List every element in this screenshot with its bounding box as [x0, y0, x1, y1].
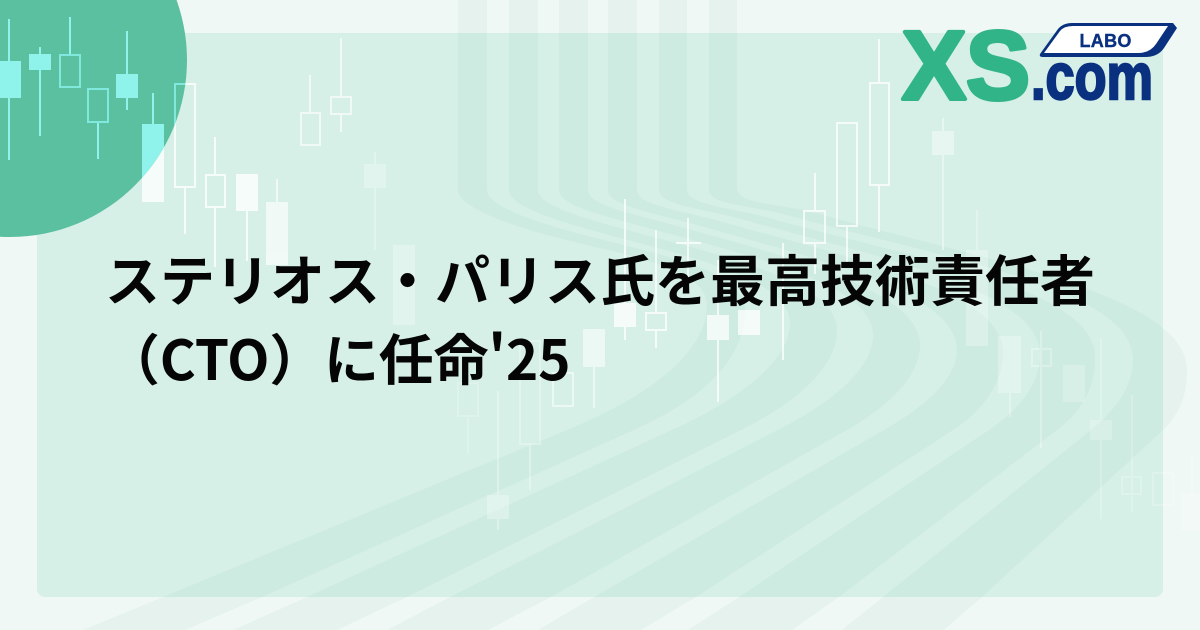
- logo wordmark: .com: .com: [1031, 40, 1153, 113]
- logo mark: XS: XS: [902, 11, 1030, 120]
- candlestick chart: white candles: [142, 38, 1200, 530]
- decorative green circle: [0, 0, 187, 237]
- logo badge: LABO: [1040, 23, 1177, 57]
- title: [105, 237, 1095, 396]
- logo: XS.com LABO: [902, 11, 1177, 120]
- candlestick chart: cyan candles in circle: [0, 17, 186, 178]
- title line 1: ステリオス・パリス氏を最高技術責任者: [105, 237, 1095, 317]
- title line 2: （CTO）に任命'25: [105, 316, 570, 396]
- logo badge: LABO: LABO: [1080, 31, 1132, 51]
